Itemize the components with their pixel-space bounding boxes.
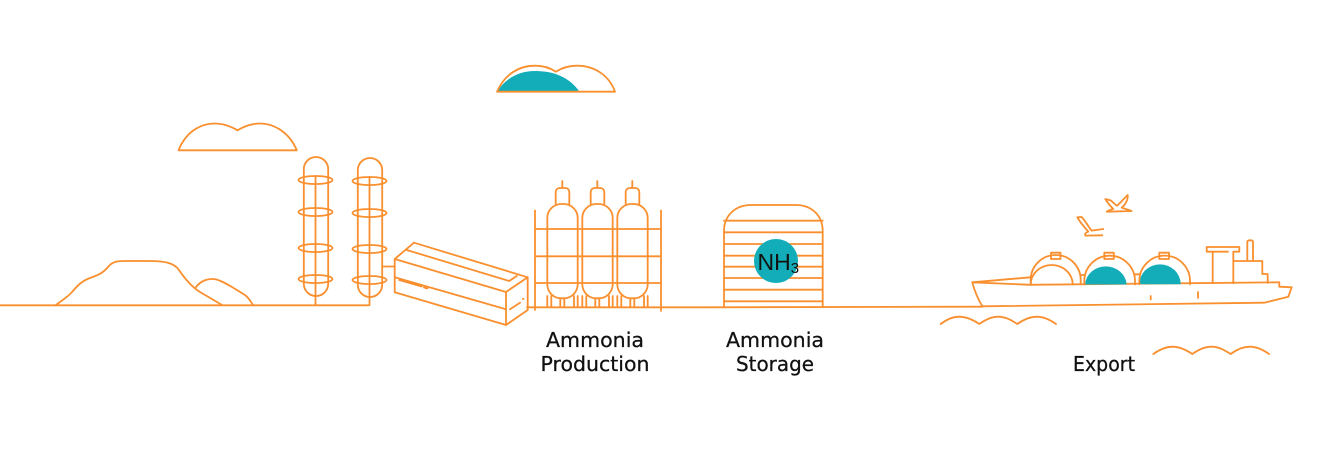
ship hull xyxy=(972,282,1292,306)
NH3 badge: NH xyxy=(758,249,791,275)
dome one xyxy=(1031,253,1081,284)
hills xyxy=(56,261,253,305)
ship xyxy=(972,240,1292,306)
NH3 badge xyxy=(754,239,799,283)
ground line: plant to ship xyxy=(527,306,982,308)
label: ammonia storage: Ammonia xyxy=(726,328,824,352)
ground line: left section xyxy=(0,304,369,306)
ship foredeck xyxy=(972,277,1030,282)
NH3 badge: 3 xyxy=(791,260,799,277)
column one xyxy=(298,157,332,305)
hull marks xyxy=(1151,292,1198,300)
dome connectors xyxy=(1081,273,1139,276)
column two xyxy=(352,158,386,305)
ammonia production plant xyxy=(535,181,661,311)
label: export: Export xyxy=(1073,352,1135,376)
label: ammonia storage: Storage xyxy=(736,352,814,376)
connector pipe xyxy=(383,266,395,268)
bird: upper xyxy=(1105,195,1132,212)
waves: left xyxy=(941,317,1056,324)
ship bridge and funnel xyxy=(1207,240,1268,283)
cloud: partly filled teal xyxy=(497,66,615,92)
waves: right xyxy=(1153,347,1269,354)
ammonia storage tank xyxy=(724,205,823,307)
dome two xyxy=(1084,253,1135,284)
label: ammonia production: Ammonia xyxy=(546,328,644,352)
container box xyxy=(395,243,528,325)
bird: lower xyxy=(1077,217,1103,236)
dome three xyxy=(1139,253,1190,284)
cloud: outline over the hills xyxy=(178,124,297,150)
label: ammonia production: Production xyxy=(540,352,650,376)
